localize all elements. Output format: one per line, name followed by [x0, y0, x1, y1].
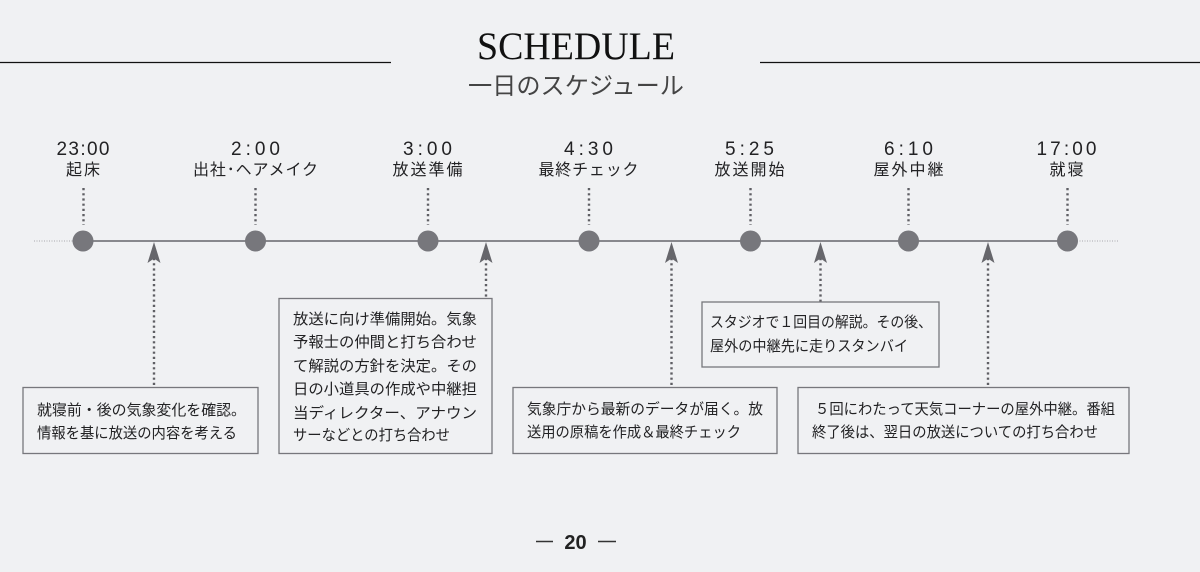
- milestone: 17:00: [1036, 139, 1096, 252]
- milestone: 23:00: [56, 139, 110, 252]
- callout: broadcast preparation: サーなどとの打ち合わせ: [293, 427, 450, 444]
- title: [0, 25, 1200, 100]
- callout: broadcast preparation: て解説の方針を決定。その: [293, 358, 477, 375]
- milestone: 5:25: 放送開始: [714, 161, 784, 179]
- milestone: 2:00: 出社･ヘアメイク: [193, 161, 318, 179]
- milestone: 6:10: 6:10: [884, 139, 933, 160]
- milestone: 3:00: 放送準備: [392, 161, 462, 179]
- milestone: 5:25: [714, 139, 784, 252]
- callout: studio commentary: スタジオで１回目の解説。その後、: [710, 314, 932, 331]
- callout: broadcast preparation: [279, 298, 492, 454]
- milestone: 17:00: 17:00: [1036, 139, 1096, 160]
- callout: studio commentary: 屋外の中継先に走りスタンバイ: [710, 338, 908, 355]
- arrow: to box 5: [982, 242, 994, 387]
- milestone: 4:30: 最終チェック: [538, 161, 638, 179]
- page number: [536, 532, 616, 554]
- callout: bedtime check: [23, 388, 258, 454]
- callout: broadcast preparation: 当ディレクター、アナウン: [293, 404, 477, 422]
- callout: latest data: [513, 388, 777, 454]
- callout: bedtime check: 就寝前・後の気象変化を確認。: [37, 402, 246, 419]
- callout: bedtime check: 情報を基に放送の内容を考える: [37, 425, 237, 442]
- callout: broadcast preparation: 日の小道具の作成や中継担: [293, 381, 477, 398]
- milestone: 3:00: [392, 139, 462, 252]
- milestone: 4:30: 4:30: [564, 139, 613, 160]
- milestone: 23:00: 23:00: [56, 139, 110, 160]
- milestone: 4:30: [538, 139, 638, 252]
- callout: outdoor broadcasts: 終了後は、翌日の放送についての打ち合わせ: [812, 424, 1098, 441]
- milestone: 6:10: 屋外中継: [874, 161, 944, 179]
- callout: latest data: 気象庁から最新のデータが届く。放: [527, 400, 763, 418]
- callout: broadcast preparation: 放送に向け準備開始。気象: [293, 311, 477, 328]
- milestone: 2:00: 2:00: [231, 139, 280, 160]
- milestone: 23:00: 起床: [66, 161, 100, 179]
- title: 一日のスケジュール: [468, 73, 684, 100]
- callout: latest data: 送用の原稿を作成＆最終チェック: [527, 424, 741, 441]
- arrow: to box 4: [814, 242, 827, 302]
- milestone: 3:00: 3:00: [403, 139, 452, 160]
- arrow: to box 3: [665, 242, 678, 387]
- milestone: 6:10: [874, 139, 944, 252]
- callout: studio commentary: [702, 302, 939, 367]
- title: SCHEDULE: [477, 25, 675, 68]
- callout: outdoor broadcasts: [798, 388, 1129, 454]
- arrow: to box 1: [148, 242, 160, 387]
- milestone: 5:25: 5:25: [725, 139, 774, 160]
- milestone: 17:00: 就寝: [1050, 161, 1084, 179]
- milestone: 2:00: [193, 139, 318, 252]
- callout: broadcast preparation: 予報士の仲間と打ち合わせ: [293, 334, 477, 351]
- timeline axis: [34, 240, 1119, 242]
- arrow: to box 2: [480, 242, 492, 298]
- page number: 20: [564, 532, 587, 554]
- callout: outdoor broadcasts: ５回にわたって天気コーナーの屋外中継。番組: [815, 401, 1115, 418]
